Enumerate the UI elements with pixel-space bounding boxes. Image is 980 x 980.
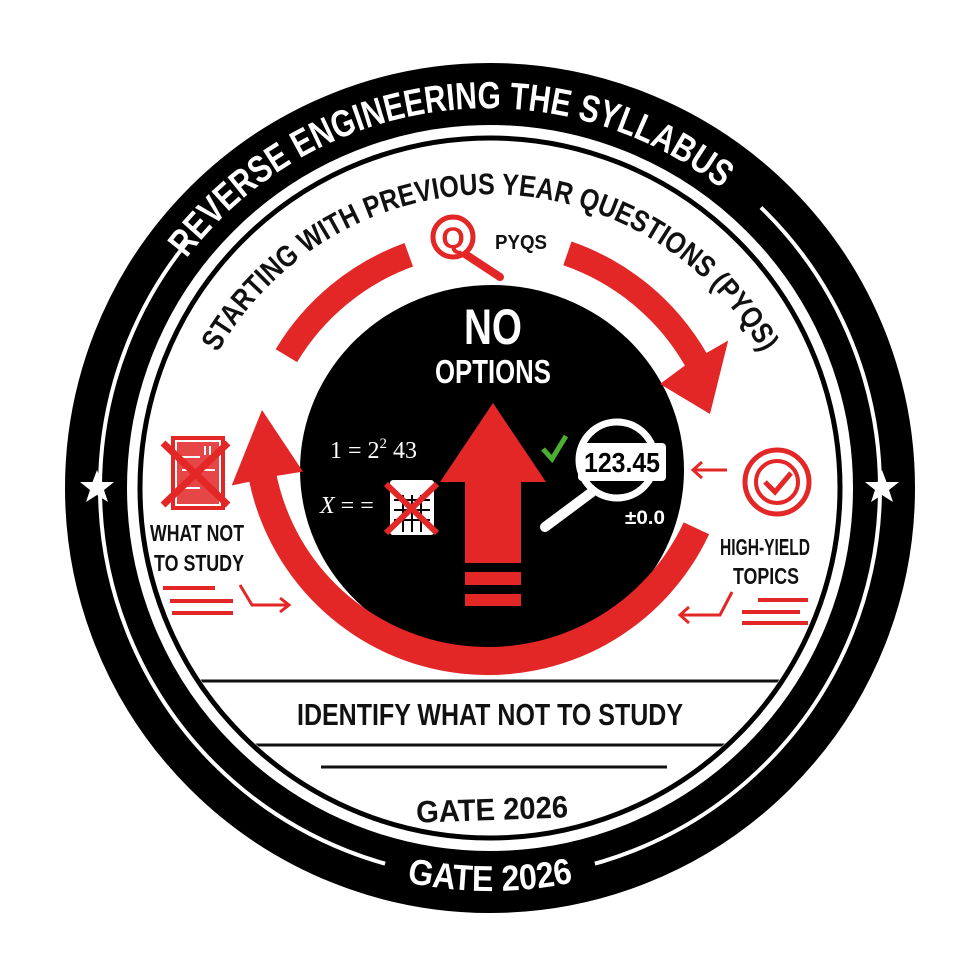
right item: high-yield topics: TOPICS <box>733 563 799 589</box>
footer text: GATE 2026: GATE 2026 <box>415 789 569 830</box>
ring title: reverse engineering: REVERSE ENGINEERING THE SYLLABUS <box>167 82 733 257</box>
icon: magnifier with value <box>543 422 666 529</box>
icon: magnifier with value: ±0.0 <box>625 508 665 529</box>
right item: high-yield topics <box>680 450 810 623</box>
red arrow: top right <box>563 242 728 414</box>
heading: NO OPTIONS <box>435 299 551 390</box>
red arrow: lower loop <box>232 410 709 675</box>
icon: crossed calculator <box>386 480 437 535</box>
icon: star right <box>865 470 899 502</box>
equations: X = = <box>319 493 374 519</box>
icon: magnifier with value: 123.45 <box>584 447 660 478</box>
inner title arc: STARTING WITH PREVIOUS YEAR QUESTIONS (PYQS) <box>202 173 778 352</box>
left item: what not to study: WHAT NOT <box>150 520 244 546</box>
icon: PYQS magnifier: PYQS <box>495 232 547 254</box>
ring footer: GATE 2026: GATE 2026 <box>410 859 571 892</box>
heading: NO OPTIONS: NO <box>464 299 522 355</box>
equations <box>319 436 417 519</box>
icon: star left <box>80 470 114 502</box>
left item: what not to study <box>150 438 289 613</box>
equations: 1 = 2 <box>330 438 380 464</box>
banner: identify what not to study: IDENTIFY WHAT NOT TO STUDY <box>297 697 683 732</box>
equations: 43 <box>387 438 417 464</box>
outer badge ring <box>96 94 884 882</box>
right item: high-yield topics: HIGH-YIELD <box>720 534 810 560</box>
central black disk <box>300 285 684 655</box>
red arc: top left <box>276 243 413 362</box>
icon: PYQS magnifier: Q <box>441 222 465 255</box>
equations: 2 <box>380 436 387 452</box>
heading: NO OPTIONS: OPTIONS <box>435 353 551 390</box>
icon: PYQS magnifier <box>433 217 547 277</box>
center up arrow <box>440 403 546 606</box>
left item: what not to study: TO STUDY <box>154 550 244 576</box>
